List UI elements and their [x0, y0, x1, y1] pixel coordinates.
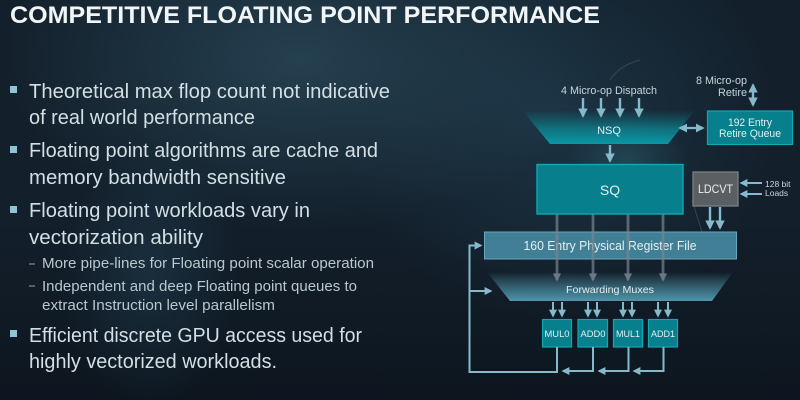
floating point block diagram [470, 75, 792, 372]
bullet 1 [10, 81, 390, 129]
bullet 1: Theoretical max flop count not indicative [29, 81, 390, 103]
label: retire [696, 75, 747, 99]
LDCVT box: LDCVT [698, 184, 733, 196]
unit MUL1: MUL1 [616, 329, 640, 339]
LDCVT down arrows [710, 207, 720, 228]
bullet 3: Floating point workloads vary in [29, 200, 310, 222]
label: loads [765, 179, 791, 198]
forwarding muxes trapezoid [487, 272, 733, 301]
bullet 2: Floating point algorithms are cache and [29, 140, 378, 162]
unit ADD0 [578, 320, 608, 347]
retire queue box: Retire Queue [719, 128, 781, 140]
bullet 4 [10, 325, 362, 373]
NSQ trapezoid: NSQ [597, 125, 621, 137]
label: retire: 8 Micro-op [696, 75, 747, 87]
bullet 3: vectorization ability [29, 227, 203, 249]
retire queue box [708, 111, 792, 144]
bullet 4: Efficient discrete GPU access used for [29, 325, 362, 347]
SQ box [537, 164, 683, 214]
unit ADD0: ADD0 [580, 329, 606, 339]
dispatch arrows [583, 98, 639, 116]
bullet 2 [10, 140, 378, 189]
SQ to muxes arrows [557, 214, 663, 280]
mux output arrows [553, 302, 668, 316]
unit MUL0 [542, 320, 572, 347]
load arrows [741, 183, 762, 194]
label: dispatch: 4 Micro-op Dispatch [561, 85, 657, 97]
retire double arrow [752, 85, 754, 105]
unit MUL0: MUL0 [544, 329, 570, 339]
unit ADD1 [648, 320, 678, 347]
forwarding muxes trapezoid: Forwarding Muxes [566, 284, 654, 296]
register file box: 160 Entry Physical Register File [524, 239, 697, 253]
bullet 4: highly vectorized workloads. [29, 351, 277, 373]
title: COMPETITIVE FLOATING POINT PERFORMANCE [10, 2, 600, 29]
bullet 3 [10, 200, 310, 249]
sub-bullets [29, 255, 374, 314]
label: loads: 128 bit [765, 179, 791, 189]
label: retire: Retire [718, 87, 747, 99]
unit MUL1 [614, 320, 642, 347]
feedback loop arrows [470, 246, 664, 372]
bullet list [10, 81, 390, 373]
bullet 2: memory bandwidth sensitive [29, 167, 286, 189]
NSQ trapezoid [522, 110, 695, 144]
sub-bullets: Independent and deep Floating point queues to [42, 278, 357, 295]
bullet 1: of real world performance [29, 107, 255, 129]
retire queue box: 192 Entry [728, 117, 772, 129]
register file box [484, 232, 736, 259]
sub-bullets: More pipe-lines for Floating point scalar operation [42, 255, 374, 272]
unit ADD1: ADD1 [651, 329, 675, 339]
LDCVT box [693, 172, 738, 206]
NSQ to SQ arrow [609, 145, 611, 161]
NSQ to retire queue arrow [680, 127, 703, 129]
SQ box: SQ [600, 182, 620, 198]
sub-bullets: extract Instruction level parallelism [42, 297, 275, 314]
label: loads: Loads [765, 188, 788, 198]
